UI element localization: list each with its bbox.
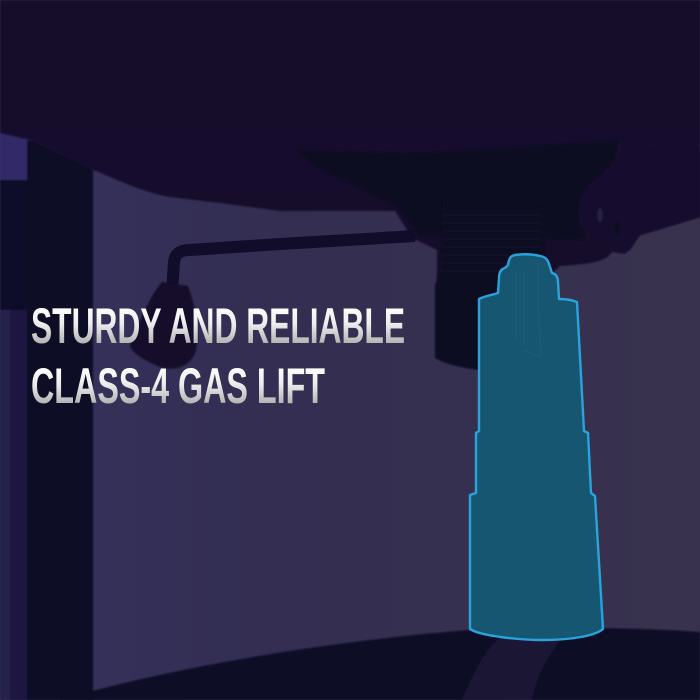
bracket holes	[598, 208, 602, 222]
left chair post	[0, 133, 93, 700]
adjustment lever	[172, 236, 415, 292]
seat underside	[0, 0, 700, 280]
chair base	[60, 628, 700, 700]
side bracket	[579, 140, 700, 253]
gas lift highlight	[470, 254, 603, 640]
mounting plate	[295, 140, 620, 240]
title	[31, 298, 405, 414]
lever knob	[130, 282, 197, 369]
title line 1: STURDY AND RELIABLE	[31, 298, 405, 354]
seat plate mechanism	[295, 140, 700, 253]
lift body	[470, 254, 603, 640]
threaded cylinder	[435, 200, 545, 370]
lift inner detail	[516, 262, 541, 357]
title line 2: CLASS-4 GAS LIFT	[31, 358, 325, 414]
